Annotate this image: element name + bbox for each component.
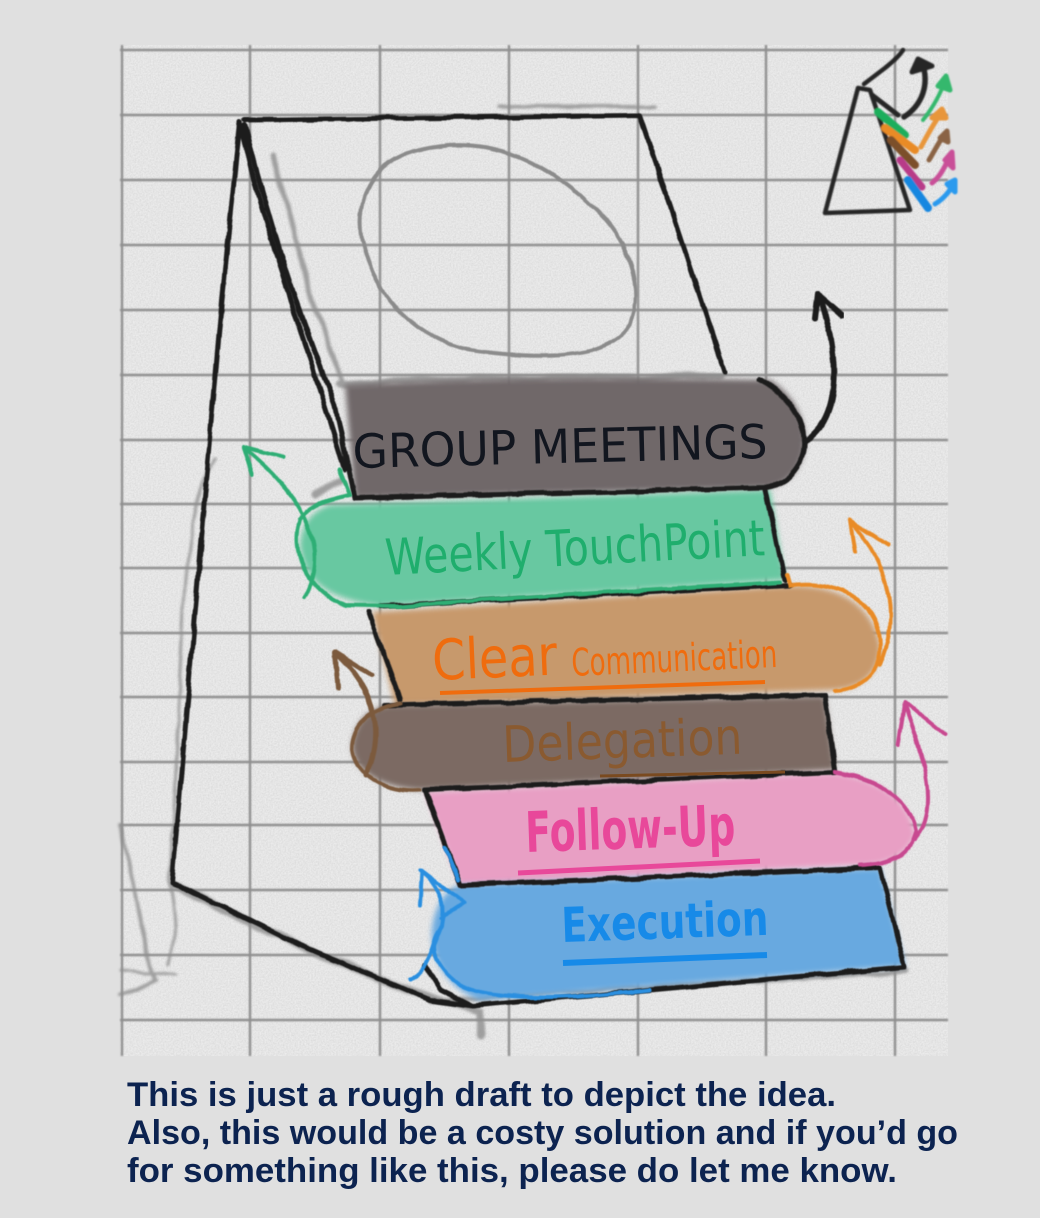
arrow: pink, Follow-Up <box>835 702 945 866</box>
band: Follow-Up <box>425 773 915 885</box>
band: Clear Communication <box>372 586 880 705</box>
label: Execution: Execution <box>560 891 769 954</box>
arrow: brown, Delegation <box>335 652 420 790</box>
arrow: green, Weekly TouchPoint <box>243 447 780 606</box>
graph paper <box>120 45 948 1056</box>
band: Group Meetings <box>345 378 805 498</box>
label: Follow-Up <box>518 794 760 873</box>
caption text: Also, this would be a costy solution and if you’d go <box>127 1114 958 1152</box>
arrow: orange, Clear Communication <box>787 520 890 690</box>
label: Follow-Up: Follow-Up <box>524 794 736 866</box>
faint pencil sketch: shadow lines <box>120 107 905 1035</box>
band: Delegation <box>352 696 835 790</box>
caption text: This is just a rough draft to depict the idea. <box>127 1076 836 1114</box>
black outline sketch of the tent card <box>172 115 905 1006</box>
label: Clear Communication: Clear <box>431 624 559 694</box>
caption text: for something like this, please do let me know. <box>127 1152 897 1190</box>
thumbnail diagram: mini tent with arrows <box>825 50 955 213</box>
label: Clear Communication <box>431 614 778 694</box>
label: Execution <box>560 891 769 963</box>
caption text <box>127 1076 958 1190</box>
arrow: black <box>805 294 842 440</box>
band: Weekly TouchPoint <box>300 490 785 606</box>
gray circle sketch <box>361 145 636 356</box>
label: Weekly TouchPoint: Weekly TouchPoint <box>384 509 766 587</box>
label: Delegation: Delegation <box>501 708 743 774</box>
label: Clear Communication: Communication <box>570 632 778 685</box>
arrow: blue, Execution <box>410 848 650 997</box>
label: Group Meetings: GROUP MEETINGS <box>352 415 768 480</box>
band: Execution <box>432 868 905 1000</box>
